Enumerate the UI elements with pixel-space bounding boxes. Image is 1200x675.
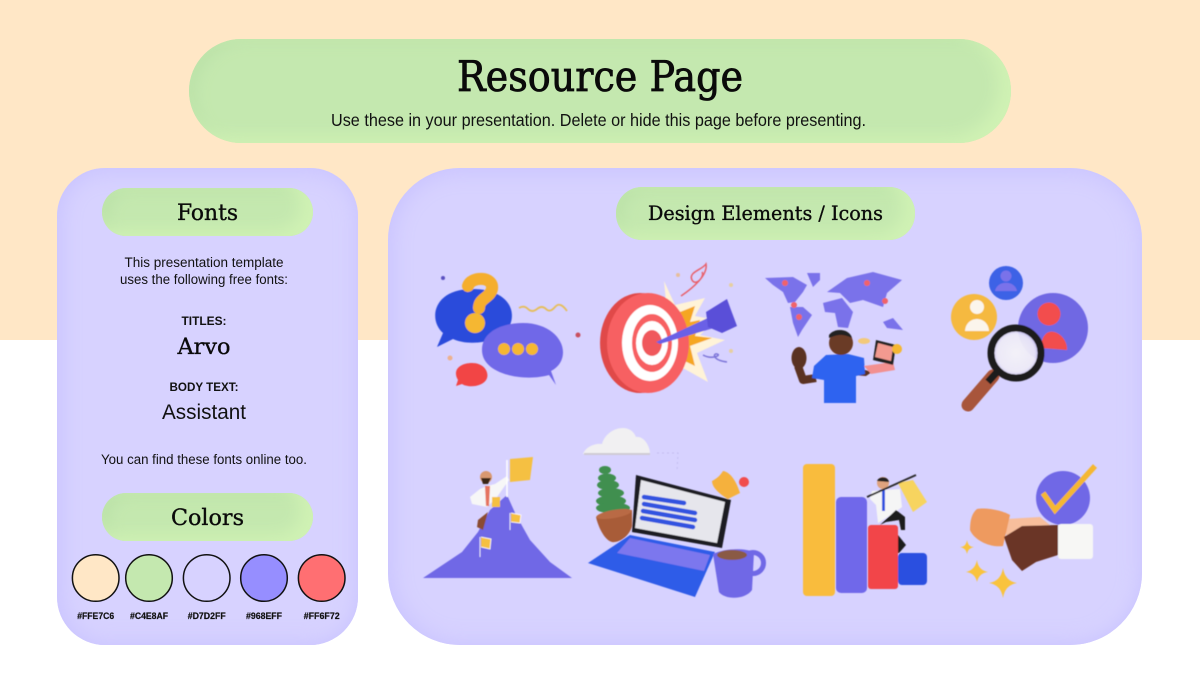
body text label: BODY TEXT: [170,380,238,394]
panel: design elements [388,168,1142,645]
color hex labels: #D7D2FF [188,611,226,621]
title pill [189,39,1011,143]
color hex labels: #C4E8AF [130,611,168,621]
design elements heading: Design Elements / Icons [648,201,883,225]
icon: chat bubbles [435,276,580,386]
fonts note: You can find these fonts online too. [101,452,307,467]
icon: mountain with flags [423,457,572,578]
icon: laptop with plant, bell and mug [583,428,764,598]
design elements heading pill [616,187,915,240]
titles label: TITLES: [182,314,226,328]
color hex labels [77,611,340,621]
colors heading pill [102,493,313,541]
panel: fonts and colors [57,168,358,645]
fonts heading pill [102,188,313,236]
background band [0,0,1200,340]
title: Resource Page [457,52,743,101]
fonts heading: Fonts [177,201,238,226]
color hex labels: #FFE7C6 [77,611,114,621]
color hex labels: #968EFF [246,611,282,621]
fonts intro text: This presentation template [124,255,284,270]
icon: target with dart [600,264,737,393]
icon: handshake with checkmark [960,466,1095,598]
icon: bar chart with person [803,464,927,596]
fonts intro text [120,255,288,287]
colors heading: Colors [171,506,244,531]
fonts intro text: uses the following free fonts: [120,272,288,287]
titles font name: Arvo [176,335,230,360]
icon: magnifier and users [951,266,1088,405]
color swatches [72,555,345,601]
color hex labels: #FF6F72 [304,611,340,621]
subtitle: Use these in your presentation. Delete or hide this page before presenting. [331,110,866,130]
body font name: Assistant [162,401,246,424]
icon: world map and person [765,272,903,403]
